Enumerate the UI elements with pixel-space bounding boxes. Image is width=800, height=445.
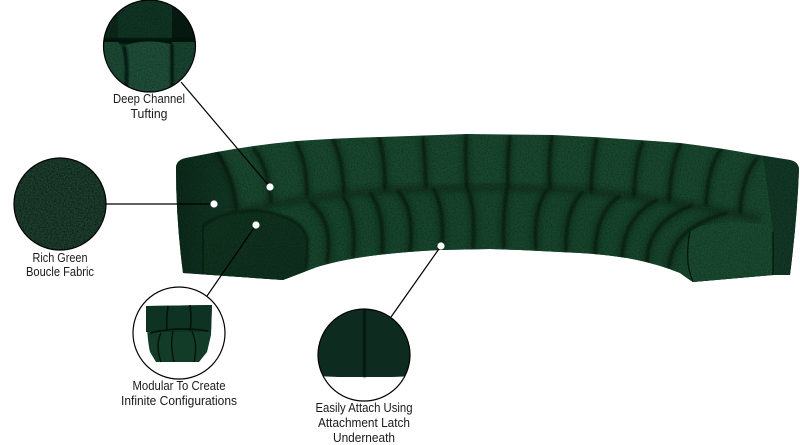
soft back seam shading: [217, 134, 758, 213]
line: boucle fabric: [106, 203, 214, 205]
label: rich green boucle fabric: Rich Green: [32, 251, 88, 265]
line: deep channel tufting: [181, 82, 270, 187]
label: attachment latch: Easily Attach Using: [316, 401, 413, 415]
seat base: [205, 249, 772, 282]
icon: latch detail circle: [317, 308, 411, 402]
label: modular: Infinite Configurations: [121, 394, 237, 408]
right front seat block: [690, 224, 772, 282]
line: attachment latch: [391, 246, 441, 317]
label: rich green boucle fabric: [26, 251, 94, 279]
label: modular: [121, 379, 237, 408]
label: attachment latch: Attachment Latch: [318, 416, 410, 430]
left arm: [176, 152, 236, 274]
line: modular: [207, 225, 256, 296]
left front seat block: [203, 211, 308, 285]
icon: fabric swatch circle: [13, 157, 107, 251]
right arm: [762, 156, 799, 275]
title: deep channel tufting: Deep Channel: [113, 92, 185, 106]
title: deep channel tufting: Tufting: [130, 107, 168, 121]
sofa back base: [170, 130, 800, 285]
label: attachment latch: Underneath: [333, 431, 395, 445]
icon: tufting detail circle: [100, 0, 200, 95]
label: modular: Modular To Create: [132, 379, 226, 393]
back channel seams: [217, 134, 758, 213]
label: attachment latch: [316, 401, 413, 445]
title: deep channel tufting: [113, 92, 185, 121]
label: rich green boucle fabric: Boucle Fabric: [26, 265, 94, 279]
soft seat seam shading: [237, 187, 760, 268]
icon: modular chair circle: [133, 287, 225, 379]
seat channel seams: [310, 188, 727, 268]
fabric texture: [170, 130, 800, 285]
callout dots: [210, 183, 445, 250]
chair module: [146, 305, 212, 362]
sofa: [170, 130, 800, 285]
